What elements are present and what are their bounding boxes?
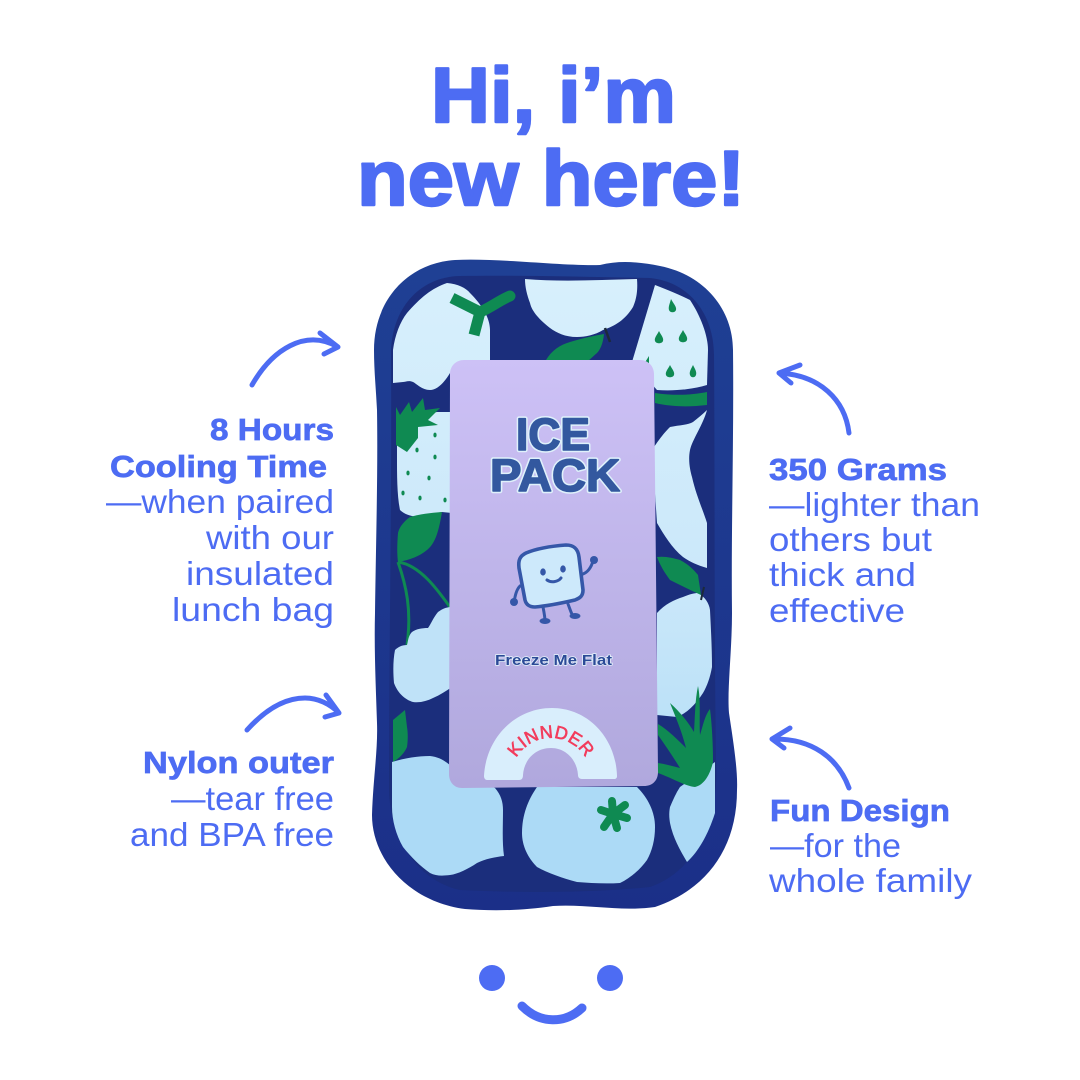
callout: 8 hours cooling time: lunch bag: [172, 591, 334, 628]
cherry stems: [398, 562, 452, 645]
callout: 8 hours cooling time: —when paired: [106, 483, 334, 520]
callout: nylon outer: —tear free: [171, 780, 334, 817]
strawberry seeds: [401, 433, 447, 502]
arrow: [779, 365, 849, 433]
callout: 8 hours cooling time: insulated: [186, 555, 334, 592]
smiley face: [479, 965, 623, 1020]
tomato star: [601, 801, 627, 828]
fruit: right round: [657, 593, 712, 717]
callout: 350 grams: effective: [769, 592, 905, 629]
callout: fun design: Fun Design: [770, 793, 950, 828]
callout: 8 hours cooling time: 8 Hours: [210, 412, 334, 447]
label card: [449, 360, 658, 788]
right leaf stem mark: [701, 587, 704, 600]
label title: ICE PACK: PACK: [490, 450, 621, 501]
fruit: bell pepper: [393, 283, 490, 390]
callout: nylon outer: and BPA free: [130, 816, 334, 853]
callout: 350 grams: 350 Grams: [769, 452, 947, 487]
aloe leaves: [658, 686, 713, 787]
pepper stem branch: [480, 296, 510, 312]
label title: ICE PACK outline: ICE: [516, 409, 590, 460]
fruit: bottom center tomato: [522, 787, 655, 883]
arrow: [252, 333, 338, 385]
title: [357, 51, 745, 222]
label title: ICE PACK: [490, 409, 621, 501]
fruit: watermelon slice: [632, 285, 708, 390]
arrow: [772, 728, 849, 788]
melon stem mark: [605, 328, 610, 342]
left leaf: [397, 512, 442, 562]
arrow: [247, 695, 339, 730]
brand arch: [484, 708, 617, 780]
callout: 350 grams: —lighter than: [769, 486, 980, 523]
watermelon seeds: [644, 299, 696, 377]
callout: 8 hours cooling time: [106, 333, 338, 628]
callout: fun design: [768, 728, 973, 899]
strawberry leaves: [396, 398, 440, 452]
pack outer shell: [372, 260, 737, 910]
title: new here!: [357, 134, 745, 222]
label title: ICE PACK outline: PACK: [490, 450, 621, 501]
callout: fun design: —for the: [770, 827, 901, 864]
pack inner panel: [389, 276, 716, 892]
pepper stem: [452, 298, 480, 335]
fruit: bottom left lemon: [392, 756, 504, 876]
fruit: left cloud: [393, 607, 452, 702]
fruit: right bottom: [669, 762, 715, 862]
callout: 350 grams: others but: [769, 521, 932, 558]
fruit: banana pear: [652, 410, 707, 568]
callout: nylon outer: [130, 695, 339, 853]
label title: ICE PACK: ICE: [516, 409, 590, 460]
watermelon rind stripe: [655, 392, 707, 406]
callout: 350 grams: [769, 365, 980, 629]
callout: 8 hours cooling time: Cooling Time: [110, 449, 327, 484]
fruit: strawberry: [397, 412, 452, 517]
tagline: Freeze Me Flat: [495, 653, 612, 669]
callout: 350 grams: thick and: [769, 556, 916, 593]
callout: fun design: whole family: [768, 862, 973, 899]
title: Hi, i’m: [431, 51, 676, 139]
ice pack product: [372, 260, 738, 910]
green sliver: [393, 710, 408, 762]
right leaf: [657, 557, 701, 595]
fruit: melon half: [525, 279, 637, 337]
brand arch: KINNDER: [506, 725, 594, 758]
callout: 8 hours cooling time: with our: [205, 519, 334, 556]
label title: ICE PACK outline: [490, 409, 621, 501]
callout: nylon outer: Nylon outer: [143, 745, 334, 780]
mascot: ice cube: [510, 545, 598, 624]
melon leaf: [546, 334, 604, 362]
